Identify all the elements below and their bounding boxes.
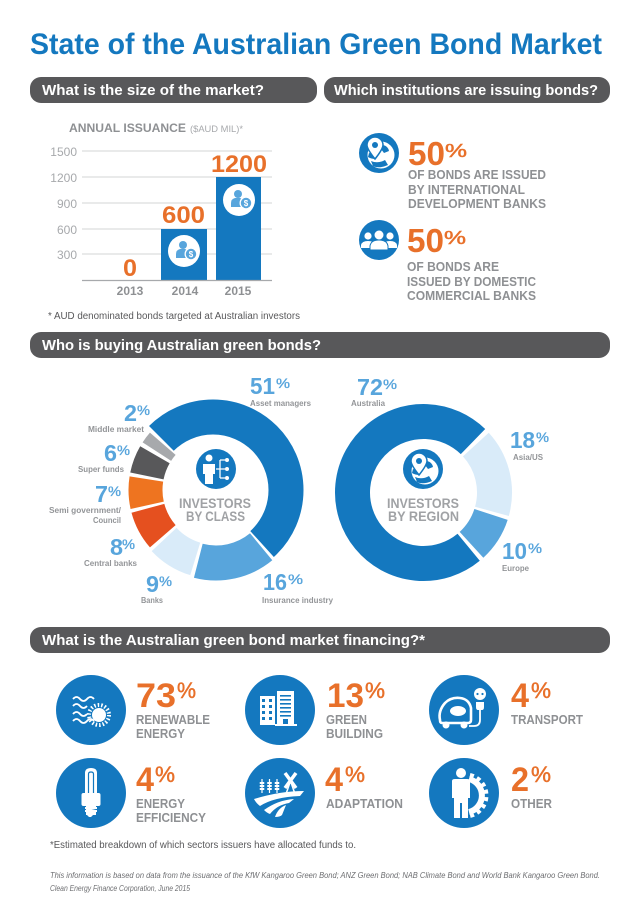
label: super funds: Super funds: [78, 465, 125, 474]
label: central banks: Central banks: [84, 559, 138, 568]
label: middle market: %: [137, 402, 150, 418]
text: green building: GREEN: [326, 713, 367, 727]
bar 2014: [161, 229, 207, 280]
icon: investor 2014: $: [189, 250, 194, 259]
stat: 4% adaptation: %: [345, 762, 365, 787]
heading: institutions: [324, 77, 610, 103]
label: semi government: Council: [93, 516, 121, 525]
icon: investor 2015: [223, 184, 255, 216]
stat: 4% adaptation: 4: [325, 761, 343, 799]
text: green building: BUILDING: [326, 727, 383, 741]
text: energy efficiency: [136, 797, 207, 825]
text: international banks: DEVELOPMENT BANKS: [408, 197, 546, 211]
bar values: 600: [162, 202, 205, 229]
y axis labels: 1200: [50, 171, 77, 185]
icon: globe pin: [403, 449, 443, 489]
panel: investors by region donut: [323, 374, 549, 593]
heading: who is buying: Who is buying Australian green bonds?: [42, 337, 321, 354]
stat: 4% transport: [511, 677, 551, 715]
y axis labels: [50, 145, 77, 262]
stat: 50% domestic: 50: [407, 222, 444, 259]
label: banks: %: [159, 573, 172, 589]
label: europe: 10: [502, 538, 527, 564]
label: banks: 9: [146, 571, 159, 597]
icon: investor class: [196, 449, 236, 489]
heading: financing: What is the Australian green bond market financing?*: [42, 632, 425, 649]
stat: 4% transport: 4: [511, 677, 529, 715]
icon: buildings: [245, 675, 315, 745]
bar values: [123, 151, 267, 282]
bar values: 0: [123, 255, 137, 282]
stat: 2% other: 2: [511, 761, 529, 799]
stat: 2% other: [511, 761, 551, 799]
text: domestic banks: [407, 260, 536, 303]
label: europe: Europe: [502, 564, 530, 573]
x axis labels: 2013: [117, 284, 144, 298]
percent sign: %: [445, 141, 467, 161]
label: asia/us: [510, 427, 549, 462]
source note: This information is based on data from the issuance of the KfW Kangaroo Green Bond; ANZ Green Bond; NAB Climate Bond and World Bank Kangaroo Green Bond.: [50, 871, 600, 880]
stat: 4% transport: %: [531, 678, 551, 703]
chart footnote: * AUD denominated bonds targeted at Australian investors: [48, 311, 300, 322]
percent sign: %: [444, 228, 466, 248]
donut title: INVESTORS: [387, 496, 459, 511]
stat: 50% international: 50: [408, 135, 445, 172]
label: semi government: [49, 481, 122, 525]
donut title: BY CLASS: [186, 509, 245, 524]
icon: farm and windmill: [245, 758, 315, 828]
chart title: ANNUAL ISSUANCE: [69, 121, 186, 135]
donut title: [179, 496, 251, 524]
stat: 73%: [136, 677, 196, 715]
donut segments: [110, 387, 316, 593]
label: asia/us: %: [536, 429, 549, 445]
label: super funds: [78, 440, 130, 474]
stat: 4% adaptation: [325, 761, 365, 799]
bar values: 1200: [211, 151, 267, 178]
text: domestic banks: ISSUED BY DOMESTIC: [407, 275, 536, 289]
icon: person and gear: [429, 758, 499, 828]
label: super funds: %: [117, 442, 130, 458]
panel: green building: [245, 675, 385, 745]
icon: globe pin: [359, 133, 399, 173]
panel: energy efficiency: [56, 758, 207, 828]
text: international banks: [408, 168, 546, 211]
label: semi government: Semi government/: [49, 506, 122, 515]
label: semi government: 7: [95, 481, 108, 507]
panel: renewable energy: [56, 675, 210, 745]
icon: investor 2015: $: [244, 199, 249, 208]
label: europe: %: [528, 540, 542, 556]
panel: investors by class donut: [49, 373, 334, 605]
panel: transport: [429, 675, 583, 745]
source note: Clean Energy Finance Corporation, June 2015: [50, 884, 190, 893]
text: international banks: BY INTERNATIONAL: [408, 183, 525, 197]
source note: [50, 871, 600, 893]
label: insurance industry: 16: [263, 569, 287, 595]
stat: 2% other: %: [531, 762, 551, 787]
text: green building: [326, 713, 383, 741]
icon: waves and sun: [56, 675, 126, 745]
x axis labels: 2014: [172, 284, 199, 298]
icon: investor 2014: [168, 235, 200, 267]
label: banks: [141, 571, 172, 605]
stat: 13%: [327, 677, 385, 715]
label: middle market: Middle market: [88, 425, 144, 434]
label: asset managers: [250, 373, 312, 408]
text: other: OTHER: [511, 797, 552, 811]
x axis labels: [117, 284, 252, 298]
heading: financing: [30, 627, 610, 653]
label: middle market: 2: [124, 400, 137, 426]
label: australia: Australia: [351, 399, 386, 408]
label: insurance industry: %: [288, 571, 303, 587]
text: renewable energy: [136, 713, 210, 741]
text: energy efficiency: ENERGY: [136, 797, 186, 811]
heading: market size: What is the size of the market?: [42, 82, 264, 99]
stat: 4% efficiency: %: [155, 762, 175, 787]
label: asia/us: 18: [510, 427, 535, 453]
label: super funds: 6: [104, 440, 117, 466]
label: australia: [351, 374, 397, 408]
heading: who is buying: [30, 332, 610, 358]
text: renewable energy: RENEWABLE: [136, 713, 210, 727]
donut segments: [323, 392, 524, 593]
label: central banks: 8: [110, 534, 123, 560]
icon: light bulb: [56, 758, 126, 828]
donut title: [387, 496, 459, 524]
stat: 73%: 73: [136, 677, 176, 715]
text: domestic banks: OF BONDS ARE: [407, 260, 499, 274]
bar 2015: [216, 177, 261, 280]
label: asset managers: Asset managers: [250, 399, 312, 408]
donut title: INVESTORS: [179, 496, 251, 511]
stat: 4% efficiency: 4: [136, 761, 154, 799]
stat: 13%: %: [365, 678, 385, 703]
icon: people: [359, 220, 399, 260]
y axis labels: 600: [57, 223, 77, 237]
x axis labels: 2015: [225, 284, 252, 298]
label: australia: 72: [357, 374, 383, 400]
text: transport: TRANSPORT: [511, 713, 583, 727]
text: adaptation: ADAPTATION: [326, 797, 403, 811]
text: domestic banks: COMMERCIAL BANKS: [407, 289, 536, 303]
y axis labels: 1500: [50, 145, 77, 159]
label: banks: Banks: [141, 596, 164, 605]
heading: market size: [30, 77, 317, 103]
chart unit: ($AUD MIL)*: [190, 124, 243, 135]
label: asia/us: Asia/US: [513, 453, 544, 462]
y axis labels: 900: [57, 197, 77, 211]
label: europe: [502, 538, 542, 573]
label: australia: %: [383, 376, 397, 392]
text: energy efficiency: EFFICIENCY: [136, 811, 207, 825]
label: central banks: [84, 534, 138, 568]
y axis labels: 300: [57, 248, 77, 262]
icon: electric car: [429, 675, 499, 745]
text: renewable energy: ENERGY: [136, 727, 186, 741]
financing footnote: *Estimated breakdown of which sectors issuers have allocated funds to.: [50, 840, 356, 851]
panel: other: [429, 758, 552, 828]
panel: annual issuance bar chart: [48, 121, 300, 322]
donut title: BY REGION: [388, 509, 459, 524]
label: insurance industry: Insurance industry: [262, 596, 334, 605]
label: asset managers: %: [276, 375, 290, 391]
label: middle market: [88, 400, 150, 434]
label: asset managers: 51: [250, 373, 275, 399]
stat: 73%: %: [177, 678, 196, 703]
panel: adaptation: [245, 758, 403, 828]
label: central banks: %: [122, 536, 135, 552]
stat: 4% efficiency: [136, 761, 175, 799]
title: State of the Australian Green Bond Market: [30, 28, 602, 61]
label: insurance industry: [262, 569, 334, 605]
heading: institutions: Which institutions are issuing bonds?: [334, 82, 598, 99]
stat: 13%: 13: [327, 677, 364, 715]
text: international banks: OF BONDS ARE ISSUED: [408, 168, 546, 182]
panel: institutions stats: [359, 133, 546, 303]
label: semi government: %: [108, 483, 121, 499]
